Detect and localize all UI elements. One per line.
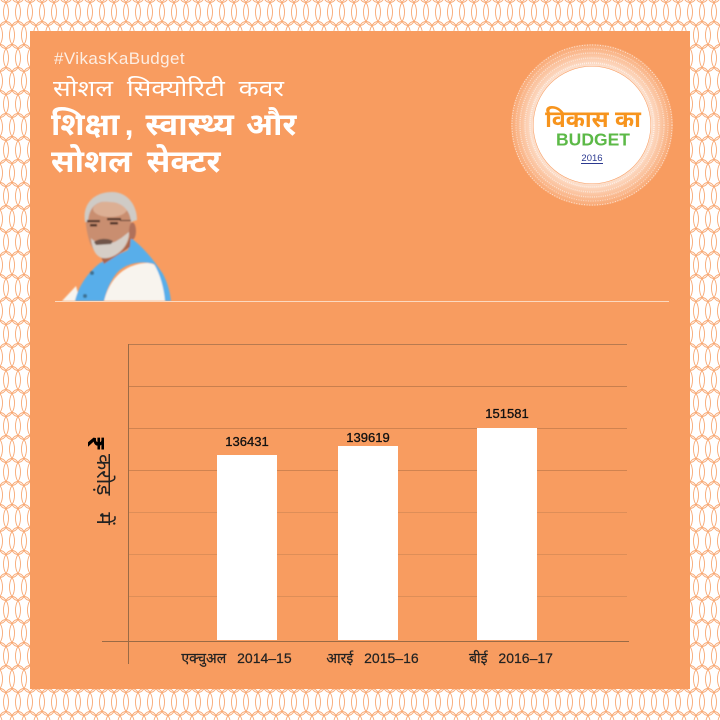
icon: guilloche ring [512, 45, 672, 205]
category labels: एक्चुअल 2014–15 [181, 650, 292, 668]
title [51, 107, 297, 179]
value labels [225, 406, 529, 449]
face [86, 198, 131, 258]
logo text budget: BUDGET [556, 130, 630, 150]
hashtag: #VikasKaBudget [54, 49, 185, 68]
value labels: 139619 [346, 430, 390, 445]
shirt [62, 286, 80, 301]
neck [99, 235, 131, 264]
beard [91, 232, 129, 258]
glasses and eyes [87, 218, 131, 226]
category labels [181, 650, 553, 668]
subtitle: सोशल सिक्योरिटी कवर [53, 76, 284, 101]
bar: BE 2016-17 [477, 428, 537, 640]
divider [55, 301, 669, 302]
hair [85, 192, 137, 222]
category labels: बीई 2016–17 [469, 650, 553, 666]
logo text hindi: विकास का [545, 106, 642, 132]
category labels: आरई 2015–16 [326, 650, 419, 666]
bar: actual 2014-15 [217, 455, 277, 640]
white disc [534, 66, 650, 184]
bar: RE 2015-16 [338, 446, 398, 640]
forehead highlight [93, 201, 127, 217]
axis title: करोड़ में [92, 454, 116, 525]
title: शिक्षा, स्वास्थ्य और [51, 107, 297, 142]
axis title [82, 436, 116, 525]
value labels: 151581 [485, 406, 529, 421]
logo badge [511, 44, 673, 206]
jacket [75, 238, 171, 301]
logo year: 2016 [581, 153, 603, 164]
axis title: ₹ [82, 436, 112, 451]
value labels: 136431 [225, 434, 269, 449]
title: सोशल सेक्टर [51, 144, 221, 179]
ear [129, 222, 136, 240]
jacket buttons [83, 271, 94, 298]
moustache [94, 239, 113, 245]
